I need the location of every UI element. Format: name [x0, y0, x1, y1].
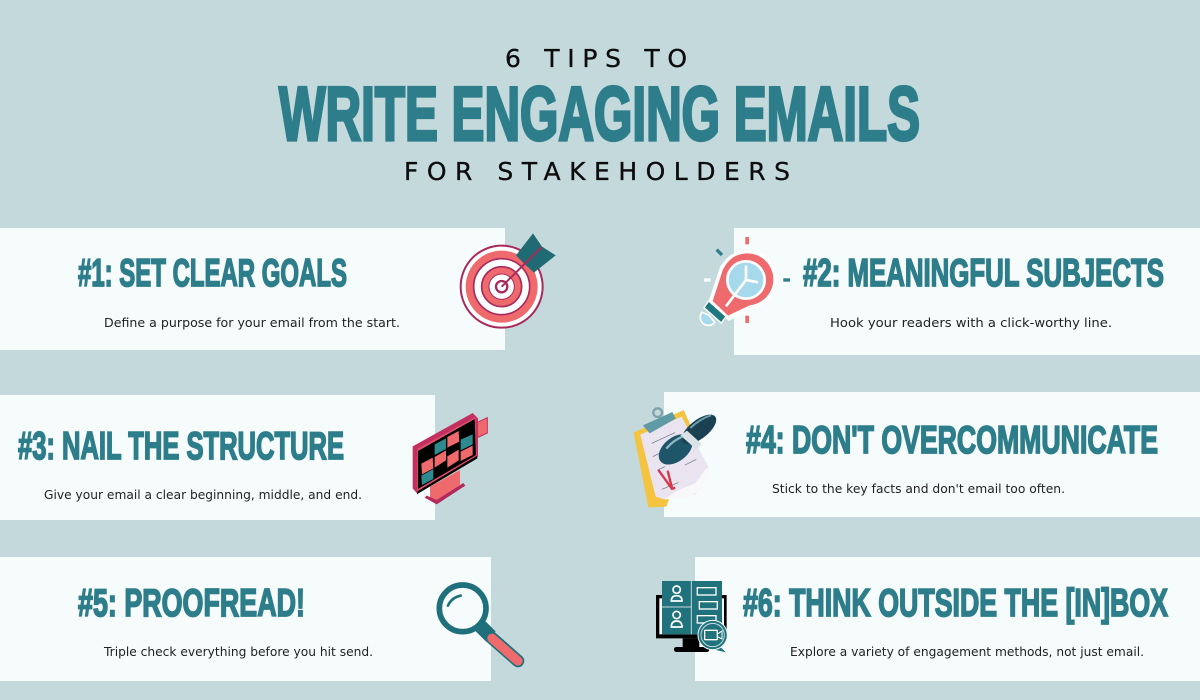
heading: tip 3: #3: NAIL THE STRUCTURE — [18, 425, 344, 468]
icon: monitor schedule — [413, 413, 487, 504]
icon: light bulb clock — [700, 237, 790, 325]
text: tip 2: Hook your readers with a click-worthy line. — [830, 316, 1112, 330]
heading: tip 5: #5: PROOFREAD! — [78, 582, 305, 625]
panel: tip 1 — [0, 228, 505, 350]
panel: tip 2 — [734, 228, 1200, 355]
title block — [279, 44, 920, 186]
panel: tip 6 — [695, 557, 1200, 681]
text: tip 5: Triple check everything before you hit send. — [103, 645, 373, 659]
panel: tip 5 — [0, 557, 491, 681]
text: tip 4: Stick to the key facts and don't email too often. — [772, 482, 1065, 496]
heading: tip 1: #1: SET CLEAR GOALS — [78, 252, 347, 295]
title line: 6 tips to: 6 TIPS TO — [505, 44, 687, 73]
icon: clipboard and pen — [634, 408, 721, 507]
text: tip 3: Give your email a clear beginning, middle, and end. — [44, 488, 362, 502]
icon: target with arrow — [461, 233, 556, 328]
text: tip 1: Define a purpose for your email from the start. — [104, 316, 400, 330]
icon: magnifying glass — [439, 585, 518, 661]
text: tip 6: Explore a variety of engagement methods, not just email. — [790, 645, 1144, 659]
title line: for stakeholders: FOR STAKEHOLDERS — [404, 157, 790, 186]
panel: tip 4 — [664, 392, 1200, 517]
panel: tip 3 — [0, 395, 435, 520]
icon: video conference monitor — [656, 581, 727, 652]
